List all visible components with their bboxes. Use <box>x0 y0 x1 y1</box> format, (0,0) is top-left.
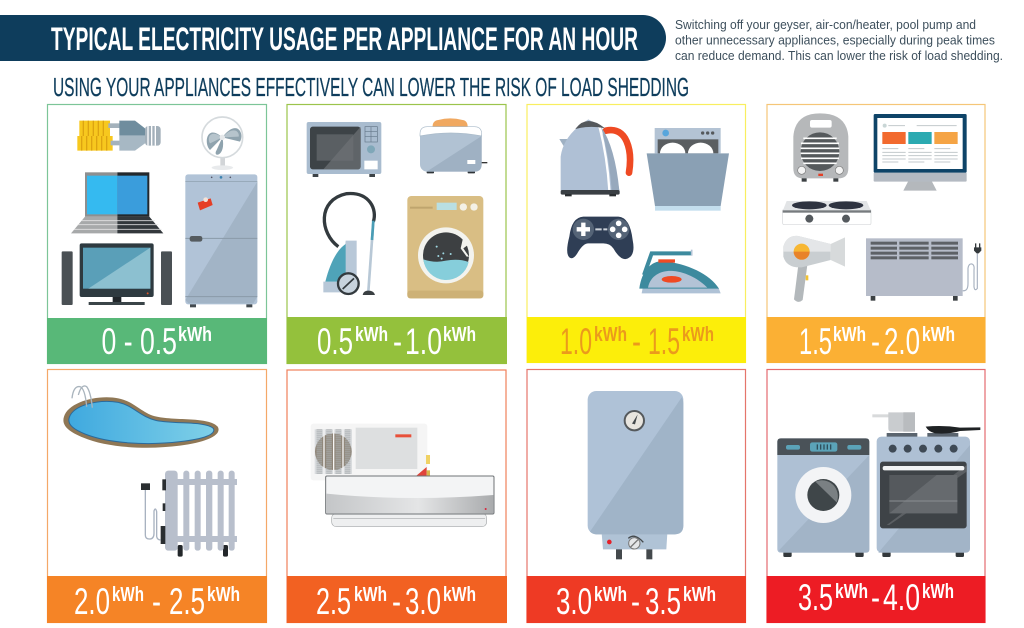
icon: geyser <box>588 391 683 559</box>
icon: dishwasher <box>647 128 729 211</box>
range label: 2.5 <box>316 581 351 622</box>
icon: fan heater <box>793 113 848 182</box>
range label: - <box>392 581 401 622</box>
range label: kWh <box>207 584 240 606</box>
range label: - <box>631 581 640 622</box>
range label: kWh <box>354 584 387 606</box>
panel: 1.5 to 2.0 kWh <box>766 104 986 363</box>
range label: - <box>152 581 161 622</box>
icon: vacuum cleaner <box>323 194 375 295</box>
icon: clothes iron <box>639 250 721 293</box>
panel: 3.5 to 4.0 kWh <box>766 370 986 623</box>
range label <box>74 581 240 622</box>
range label <box>799 321 955 362</box>
icon: beige washing machine <box>407 196 483 298</box>
icon: front-load washer <box>777 438 869 557</box>
icon: air conditioner indoor unit <box>326 476 494 527</box>
range label: - <box>393 321 402 362</box>
title banner <box>0 15 666 61</box>
panel: 0.5 to 1.0 kWh <box>287 104 507 364</box>
range label: kWh <box>683 584 716 606</box>
icon: tv with speakers <box>62 243 172 305</box>
icon: oil radiator <box>141 471 237 557</box>
range label: 0.5 <box>317 321 353 362</box>
icon: panel heater <box>866 238 981 301</box>
range label <box>316 581 476 622</box>
range label: 4.0 <box>883 577 920 618</box>
icon: air conditioner outdoor unit <box>311 424 430 480</box>
range label: 1.5 <box>648 321 680 362</box>
range label: kWh <box>833 324 866 346</box>
range label <box>798 577 954 618</box>
range label: kWh <box>594 584 627 606</box>
range label: kWh <box>594 324 627 346</box>
range label: kWh <box>682 324 714 346</box>
range label <box>317 321 476 362</box>
range label: kWh <box>355 324 388 346</box>
panel: 0 to 0.5 kWh <box>47 104 267 364</box>
range label: 2.5 <box>169 581 205 622</box>
range label: 0 - 0.5 <box>102 321 177 362</box>
icon: desk fan <box>202 117 243 170</box>
range label: kWh <box>112 584 144 606</box>
range label: kWh <box>922 581 954 603</box>
title banner: TYPICAL ELECTRICITY USAGE PER APPLIANCE FOR AN HOUR <box>51 21 638 57</box>
icon: game controller <box>567 217 633 259</box>
icon: hair dryer <box>783 236 845 302</box>
icon: microwave <box>307 122 381 177</box>
icon: kettle <box>559 119 630 196</box>
range label: 3.5 <box>798 577 833 618</box>
range label: - <box>871 321 880 362</box>
range label: kWh <box>443 584 476 606</box>
icon: light bulb <box>77 121 161 151</box>
range label: 3.0 <box>405 581 441 622</box>
range label: kWh <box>178 324 212 346</box>
icon: hot plate <box>783 201 871 225</box>
panel: 1.0 to 1.5 kWh <box>527 104 746 363</box>
range label: 2.0 <box>884 321 920 362</box>
panel: 2.5 to 3.0 kWh <box>287 370 507 623</box>
intro text block <box>675 18 1003 63</box>
range label: kWh <box>922 324 955 346</box>
icon: toaster <box>420 118 487 173</box>
intro text block: can reduce demand. This can lower the risk of load shedding. <box>675 49 1003 63</box>
icon: desktop monitor <box>874 114 967 191</box>
intro text block: other unnecessary appliances, especially during peak times <box>675 34 995 48</box>
range label: 3.0 <box>556 581 592 622</box>
range label: 3.5 <box>645 581 681 622</box>
range label <box>560 321 714 362</box>
panel: 3.0 to 3.5 kWh <box>526 370 746 623</box>
range label <box>556 581 716 622</box>
icon: fridge <box>185 174 257 307</box>
icon: laptop <box>71 172 163 233</box>
icon: swimming pool <box>63 386 219 448</box>
range label: 1.0 <box>405 321 442 362</box>
range label: 1.0 <box>560 321 592 362</box>
range label: - <box>632 321 641 362</box>
range label: kWh <box>835 581 868 603</box>
range label: kWh <box>443 324 476 346</box>
panel: 2.0 to 2.5 kWh <box>47 370 267 623</box>
intro text block: Switching off your geyser, air-con/heater, pool pump and <box>675 18 976 32</box>
icon: stove with pots <box>872 412 980 557</box>
range label: - <box>871 577 880 618</box>
range label: 1.5 <box>799 321 832 362</box>
range label: 2.0 <box>74 581 110 622</box>
